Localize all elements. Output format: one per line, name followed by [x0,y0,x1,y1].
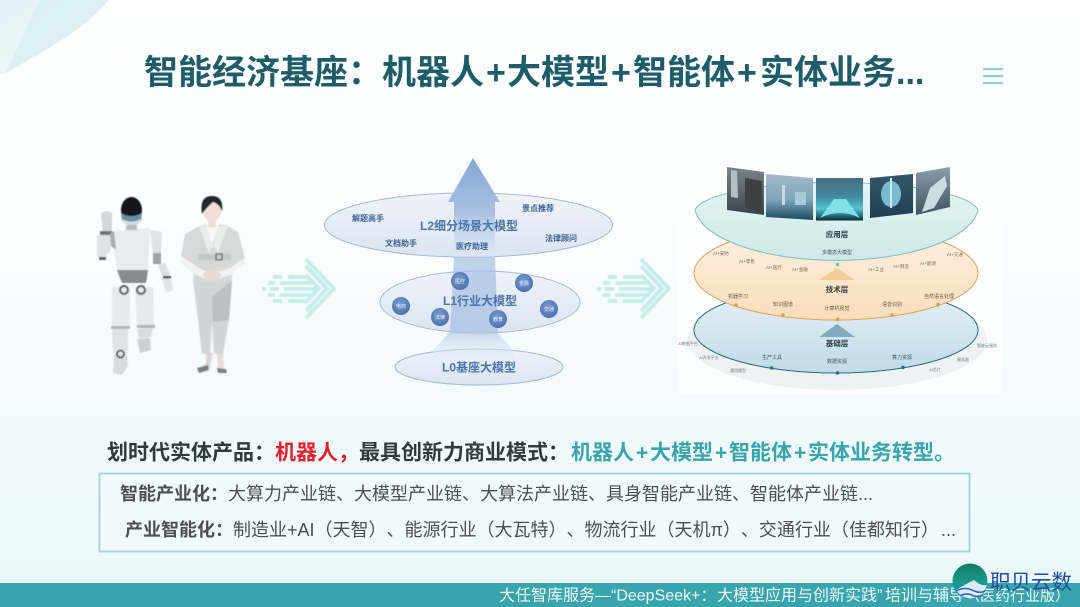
title: + [486,54,506,92]
footer bar: 大模型应用与创新实践” [717,586,882,604]
layer: foundation: 智能云服务 [977,342,997,348]
decorative corner [0,0,109,76]
layer: technology: AI+制造 [893,263,909,270]
layer L1 industry model: 医疗 [455,278,465,285]
layer L2 scenario model [324,158,612,257]
layer L1 industry model: 电商 [396,303,406,310]
panel backdrop [678,168,1002,394]
headline sentence: 智能体 [729,442,792,464]
layer: foundation: 服务器 [957,356,969,362]
layer: foundation: 生产工具 [762,354,782,361]
layer: technology: 语音识别 [882,301,902,308]
layer: foundation: 数据资源 [827,358,847,365]
layer: foundation: 通用模型 [730,367,746,373]
headline sentence: 大模型 [650,442,713,464]
headline sentence: + [715,442,727,464]
layer: technology: AI+工业 [868,266,884,272]
layer L1 industry model: 金融 [519,280,529,287]
layer: technology: AI+安防 [713,250,729,257]
layer: technology: 计算机视觉 [824,305,850,312]
layer: application [695,183,978,266]
layer: technology: AI+能源 [920,260,936,267]
up arrow lower shaft [433,332,513,362]
illustration: humanoid robot [97,197,173,375]
footer bar: 大任智库服务—“DeepSeek+： [499,586,716,604]
layer: technology: AI+交通 [947,251,963,258]
headline sentence: 实体业务转型。 [808,440,955,464]
outer base ring [687,290,987,390]
layer: technology: AI+医疗 [766,264,782,271]
layer L0 base model: L0基座大模型 [442,360,516,374]
layer L1 industry model [380,257,580,333]
layer: technology [694,226,978,321]
headline sentence: 机器人，最具创新力商业模式： [275,442,569,464]
layer: foundation: AI芯片 [929,366,941,372]
layer: foundation: AI开发平台 [699,354,719,360]
layer: technology: AI+金融 [792,266,808,273]
logo: 职贝云数 [952,564,1072,598]
layer L1 industry model: L1行业大模型 [443,293,517,308]
row: industrial intelligence: ... [941,520,956,540]
headline sentence: 机器人 [571,442,634,464]
layer L1 industry model: 交通 [544,306,554,313]
headline sentence: + [636,442,648,464]
title: 实体业务... [760,54,924,92]
title: + [737,54,757,92]
footer bar [0,583,1080,607]
row: industrial intelligence: 产业智能化：制造业+AI（天智）、能源行业（大瓦特）、物流行业（天机π）、交通行业（佳都知行） [125,520,939,540]
diagram: large model layers [324,158,612,385]
layer L0 base model [395,349,563,385]
logo: 职贝云数: 职贝云数 [990,571,1072,594]
title: + [611,54,631,92]
layer L2 scenario model: L2细分场景大模型 [420,218,518,233]
layer: technology: 知识图谱 [773,301,793,308]
arrow: dotted left arrow [262,259,334,318]
layer L2 scenario model: 解题高手 [352,213,384,223]
layer: foundation: 基础层 [826,338,849,348]
layer: application: 应用层 [826,229,849,239]
row: intelligent industrialization: 智能产业化：大算力产业链、大模型产业链、大算法产业链、具身智能产业链、智能体产业链... [120,483,873,504]
layer L2 scenario model: 医疗助理 [456,241,488,251]
headline sentence: + [794,442,806,464]
illustration: woman in grey suit [181,196,245,373]
footer bar: 培训与辅导 [885,586,965,604]
layer L2 scenario model: 法律顾问 [545,233,577,243]
layer L1 industry model: 法律 [435,314,445,321]
title: 智能经济基座：机器人 [144,54,484,92]
title: 大模型 [507,54,609,92]
footer bar: （医药行业版） [965,588,1070,604]
layer: foundation: 算力资源 [892,354,912,361]
layer: application: 多模态大模型 [822,249,852,256]
layer L2 scenario model: 景点推荐 [522,203,554,213]
layer L2 scenario model: 文档助手 [385,238,417,248]
layer L1 industry model: 教育 [493,316,503,323]
layer: technology: 自然语言处理 [924,293,954,300]
layer: technology: 技术层 [826,284,849,294]
title: 智能体 [633,54,735,92]
headline sentence: 划时代实体产品： [107,440,275,464]
image strip [727,167,950,220]
arrow: dotted right arrow [597,259,669,318]
diagram: three-layer platform [678,167,1002,394]
layer: technology: 机器学习 [728,293,748,300]
layer: foundation [678,287,997,375]
icon: menu [983,68,1003,84]
panel: two industry rows [100,474,970,552]
layer: foundation: AI数据平台 [678,340,698,346]
layer: technology: AI+零售 [739,258,755,265]
